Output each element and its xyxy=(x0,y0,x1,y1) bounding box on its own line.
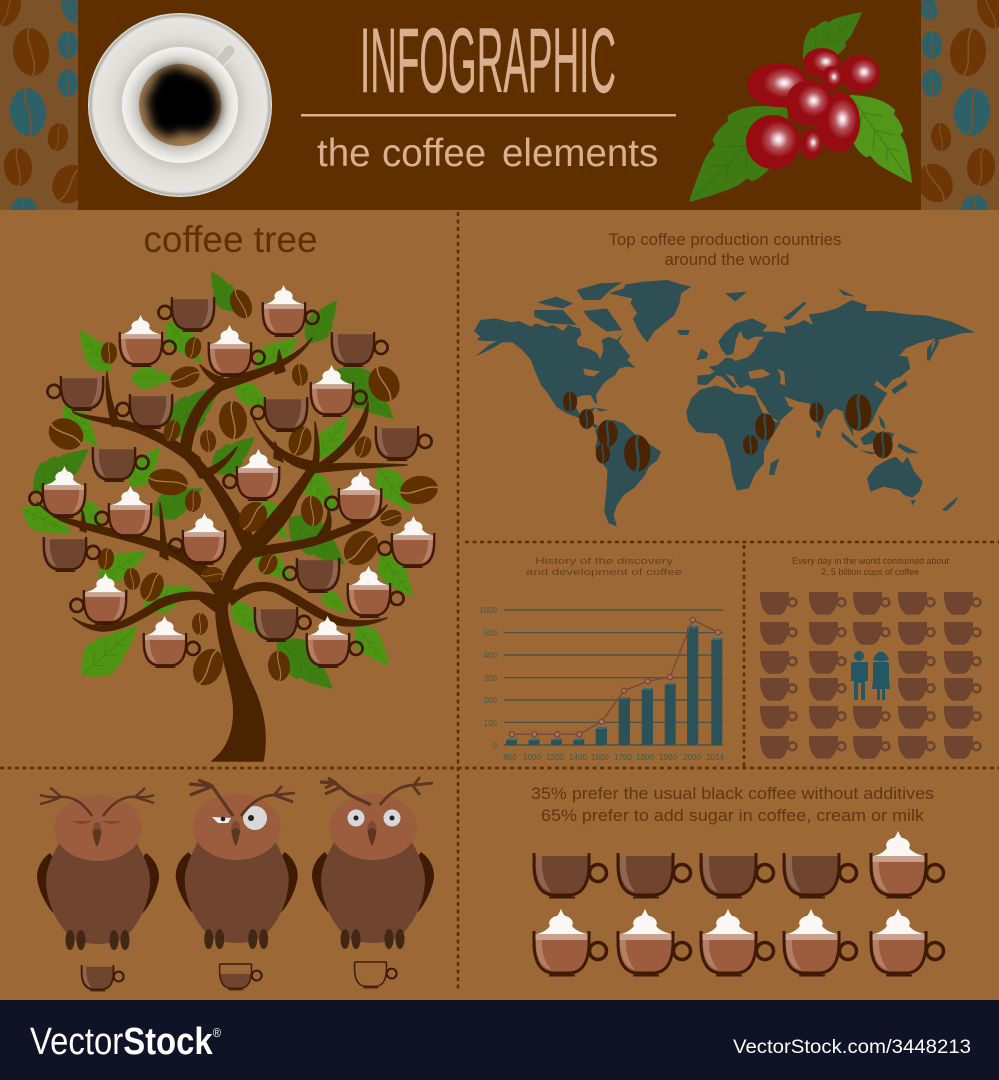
header side strip right with coffee beans xyxy=(921,0,999,210)
coffee tree xyxy=(16,265,440,761)
x-axis labels: 1800 xyxy=(636,753,654,762)
y-axis labels: 300 xyxy=(484,674,498,683)
y-axis labels: 400 xyxy=(484,651,498,660)
x-axis labels: 2000 xyxy=(683,753,701,762)
heading: daily consumption: Every day in the world consumed about xyxy=(792,556,949,566)
footer band xyxy=(0,1000,999,1080)
small cup: half xyxy=(220,964,262,990)
x-axis labels: 1400 xyxy=(569,753,587,762)
owl 3: wide awake with an empty cup xyxy=(312,777,434,949)
icon: man and woman xyxy=(851,651,890,700)
bar chart: history of coffee xyxy=(479,606,724,762)
x-axis labels xyxy=(503,753,724,762)
subtitle: the coffee elements: the xyxy=(317,132,371,175)
owl 2: half awake with a half cup xyxy=(176,780,298,949)
section dividers xyxy=(0,212,999,992)
cups on the tree xyxy=(29,285,434,667)
x-axis labels: 2014 xyxy=(706,753,724,762)
world map xyxy=(474,280,975,527)
y-axis labels xyxy=(479,606,498,750)
bars xyxy=(506,626,722,745)
trend line xyxy=(510,617,720,737)
subtitle: the coffee elements: elements xyxy=(502,132,658,175)
bar tops xyxy=(506,626,722,740)
heading: history chart: History of the discovery xyxy=(535,556,674,566)
text: coffee preferences: 35% prefer the usual black coffee without additives xyxy=(531,785,934,803)
footer stock id: VectorStock.com/3448213 xyxy=(733,1037,971,1058)
text: INFOGRAPHIC xyxy=(360,10,616,112)
tree trunk and branches xyxy=(37,338,407,761)
heading: coffee tree: coffee tree xyxy=(143,219,318,260)
tree leaves xyxy=(16,265,424,704)
x-axis labels: 850 xyxy=(503,753,517,762)
x-axis labels: 1600 xyxy=(591,753,609,762)
small cup: empty xyxy=(355,962,397,988)
y-axis labels: 200 xyxy=(484,696,498,705)
x-axis labels: 1700 xyxy=(614,753,632,762)
header side strip left with coffee beans xyxy=(0,0,78,210)
heading: top production countries: around the world xyxy=(664,250,790,269)
production beans on the map xyxy=(563,392,893,472)
text: coffee preferences: 65% prefer to add sugar in coffee, cream or milk xyxy=(541,807,925,825)
header band xyxy=(78,0,921,210)
inland seas xyxy=(583,368,785,386)
grid lines xyxy=(504,610,723,745)
footer logo: ® xyxy=(213,1025,221,1040)
x-axis labels: 1000 xyxy=(523,753,541,762)
y-axis labels: 0 xyxy=(493,741,498,750)
heading: daily consumption: 2, 5 billion cups of coffee xyxy=(821,567,919,577)
heading: history chart: and development of coffee xyxy=(526,567,682,577)
y-axis labels: 100 xyxy=(484,719,498,728)
x-axis labels: 1900 xyxy=(659,753,677,762)
subtitle: the coffee elements: coffee xyxy=(382,132,486,175)
owl 1: sleepy with a full cup xyxy=(37,788,159,950)
footer logo: VectorStock xyxy=(30,1021,227,1063)
title rule xyxy=(301,114,676,116)
pictogram: cups per day xyxy=(760,592,980,759)
small cup: full xyxy=(82,965,124,991)
coffee beans on the tree xyxy=(43,286,440,690)
x-axis labels: 1200 xyxy=(546,753,564,762)
pictogram: preference cups xyxy=(534,831,944,976)
y-axis labels: 1000 xyxy=(479,606,498,615)
y-axis labels: 500 xyxy=(484,629,498,638)
continents xyxy=(474,280,975,527)
heading: top production countries: Top coffee production countries xyxy=(609,230,841,249)
icon: coffee cup on saucer xyxy=(88,13,272,197)
icon: coffee berries with leaves xyxy=(665,0,935,227)
